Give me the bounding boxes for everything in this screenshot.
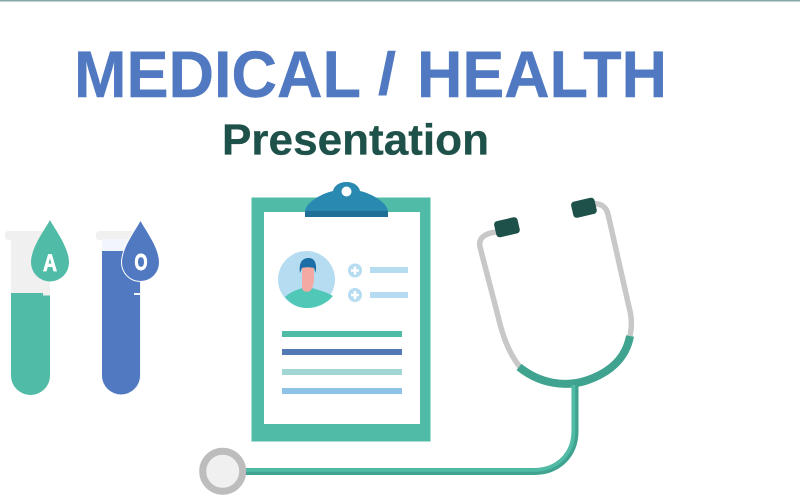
title: MEDICAL	[74, 37, 361, 111]
chest piece	[203, 451, 243, 491]
title: HEALTH	[417, 37, 667, 111]
tube yoke	[519, 336, 630, 384]
left earpiece	[493, 217, 520, 238]
icon: blood drop A: A	[43, 250, 57, 277]
main tube	[244, 385, 575, 472]
stethoscope	[203, 197, 631, 491]
test tube A	[5, 220, 69, 395]
title: /	[378, 41, 396, 107]
subtitle: Presentation	[222, 116, 489, 164]
info row 1	[348, 264, 408, 278]
icon: blood drop O: O	[134, 249, 148, 275]
headset tubes	[480, 204, 631, 367]
right earpiece	[570, 197, 597, 218]
clipboard	[252, 182, 430, 442]
icon: blood drop A	[31, 220, 69, 282]
test tube O	[96, 220, 160, 395]
patient avatar	[278, 251, 335, 308]
info row 2	[348, 288, 408, 302]
text lines	[282, 331, 402, 394]
clipboard clasp	[305, 182, 388, 217]
title	[74, 37, 667, 111]
icon: blood drop O	[122, 220, 160, 282]
